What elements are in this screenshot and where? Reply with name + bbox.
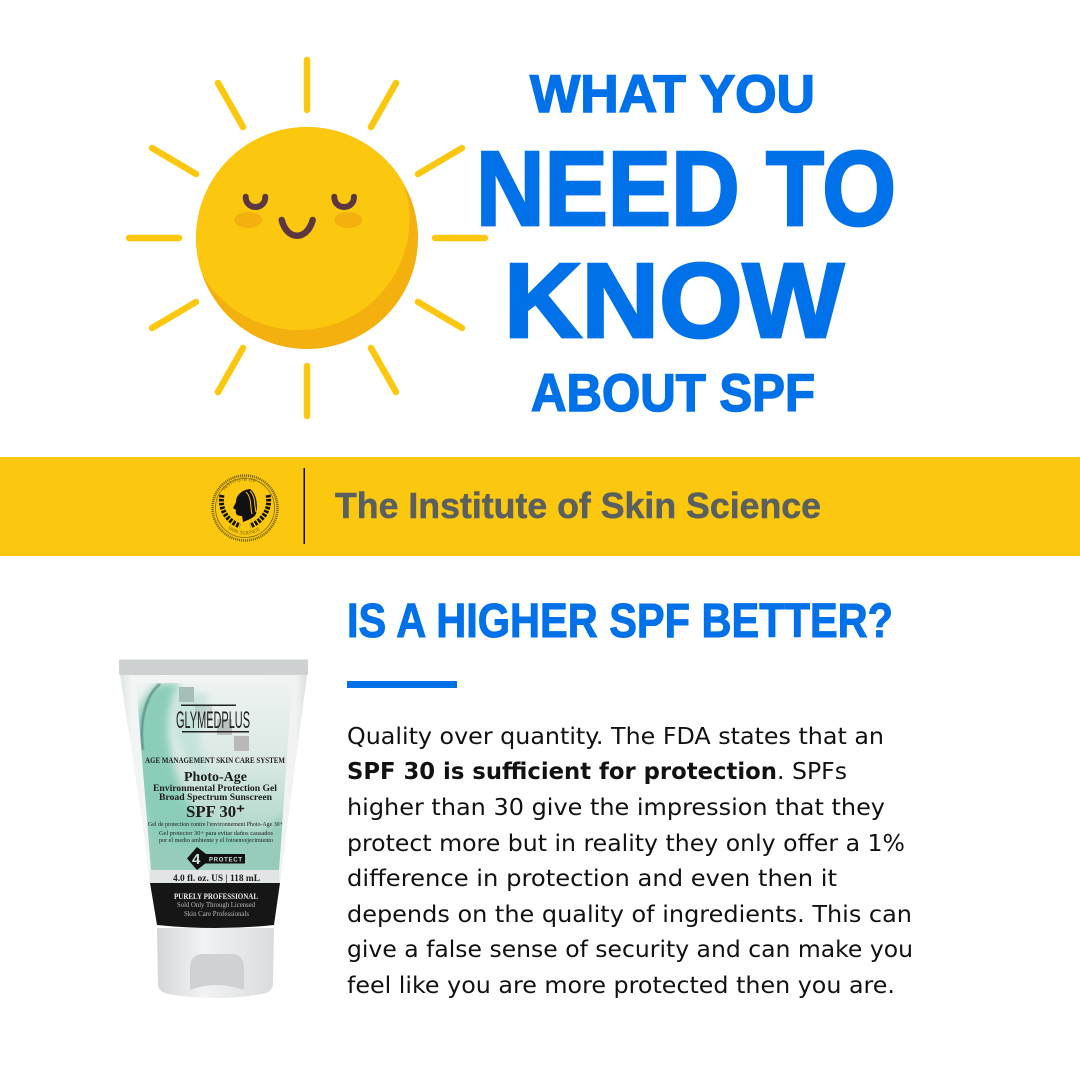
product label text: SPF 30⁺: [186, 802, 245, 821]
band text: PURELY PROFESSIONAL: [174, 892, 258, 901]
product label text: [145, 755, 285, 844]
size strip: [150, 870, 280, 884]
logo: institute seal: [211, 474, 279, 542]
body text: . SPFs: [777, 757, 847, 785]
body text: give a false sense of security and can make you: [347, 935, 913, 963]
heading rule: [347, 681, 457, 688]
brand squares: [179, 687, 249, 751]
product: sunscreen tube: [119, 660, 308, 998]
brand: [176, 704, 250, 734]
body text: difference in protection and even then it: [347, 864, 837, 892]
band text: Skin Care Professionals: [184, 910, 249, 918]
title: NEED TO: [476, 130, 896, 248]
product label text: Gel protector 30+ para evitar daños causados: [159, 830, 273, 837]
body text: feel like you are more protected then you are.: [347, 971, 895, 999]
product label text: AGE MANAGEMENT SKIN CARE SYSTEM: [145, 755, 285, 765]
cap notch: [190, 954, 244, 990]
body text: [347, 722, 913, 999]
product: sunscreen tube: GLYMEDPLUS: [176, 707, 250, 734]
body text: protect more but in reality they only offer a 1%: [347, 829, 905, 857]
black band: [150, 883, 280, 928]
woman profile: [233, 489, 257, 522]
title: WHAT YOU: [530, 65, 815, 124]
product label text: por el medio ambiente y el fotoenvejecimiento: [159, 837, 273, 844]
product label text: Environmental Protection Gel: [153, 784, 277, 794]
body text: SPF 30 is sufficient for protection: [347, 757, 777, 785]
product label text: Gel de protection contre l'environnement Photo-Age 30+: [148, 821, 283, 828]
sun face: [234, 197, 362, 236]
product label text: Broad Spectrum Sunscreen: [159, 793, 273, 803]
size text: 4.0 fl. oz. US | 118 mL: [173, 874, 260, 884]
divider: [304, 468, 305, 544]
cap: [157, 928, 274, 998]
icon: smiling sun: [129, 60, 485, 416]
band text: Sold Only Through Licensed: [177, 901, 255, 909]
section heading: IS A HIGHER SPF BETTER?: [347, 595, 893, 648]
sun rays: [129, 60, 485, 416]
body text: depends on the quality of ingredients. This can: [347, 900, 912, 928]
4 protect badge: 4: [192, 851, 201, 868]
organisation name: The Institute of Skin Science: [335, 485, 821, 526]
band text: [174, 892, 258, 918]
logo: institute seal: SKIN SCIENCE: [228, 526, 260, 535]
title: ABOUT SPF: [531, 364, 815, 423]
body text: higher than 30 give the impression that they: [347, 793, 885, 821]
label artwork: [137, 683, 290, 870]
title: [476, 65, 896, 423]
body text: Quality over quantity. The FDA states that an: [347, 722, 884, 750]
sun body: [196, 127, 418, 349]
tube body: [120, 675, 307, 884]
tube crimp: [119, 660, 308, 675]
banner: [0, 457, 1080, 556]
title: KNOW: [504, 242, 844, 360]
4 protect badge: [187, 847, 245, 870]
4 protect badge: PROTECT: [209, 858, 242, 864]
laurels: [221, 495, 240, 526]
logo: institute seal: INSTITUTE OF: [222, 478, 256, 490]
product label text: Photo-Age: [184, 769, 247, 784]
